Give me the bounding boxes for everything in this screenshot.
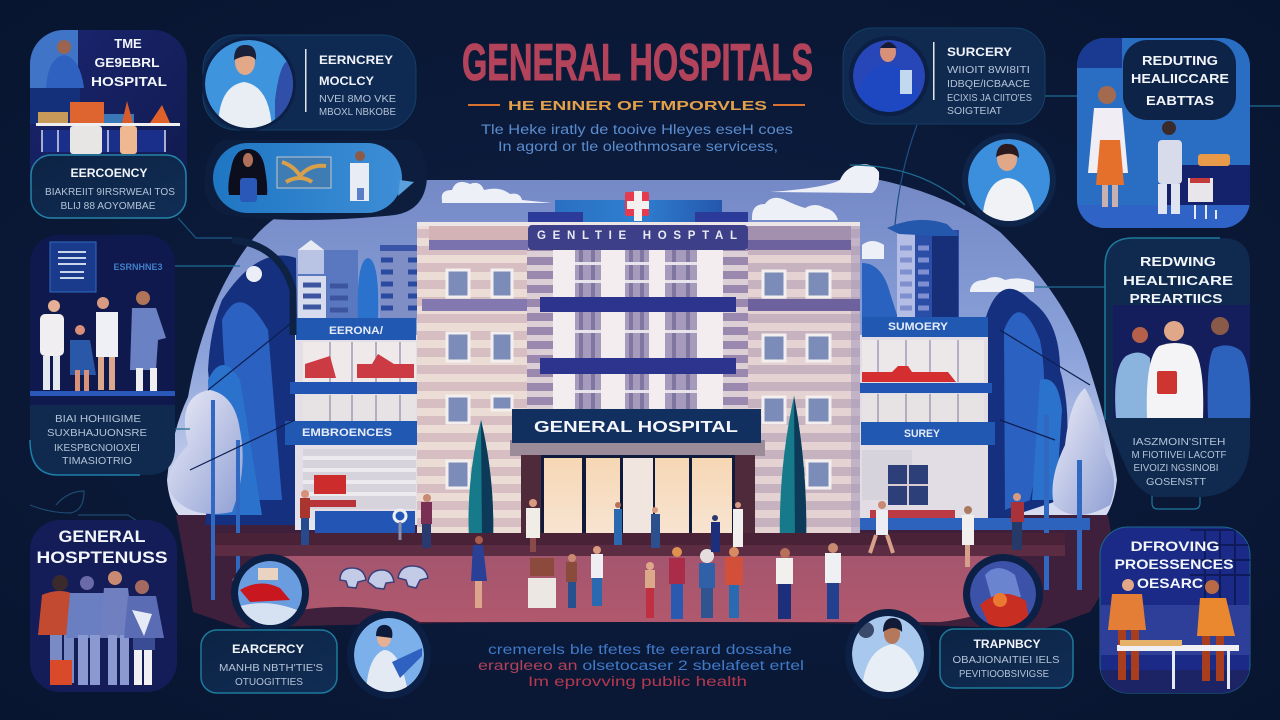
emergency emblem on counter — [394, 510, 406, 540]
striped side strips — [527, 250, 748, 440]
intro paragraph: In agord or tle oleothmosare servicess, — [498, 139, 778, 154]
backdrop grid — [1100, 530, 1250, 695]
heading: HOSPITAL — [91, 74, 167, 89]
heading: GENERAL — [58, 528, 146, 546]
dark arch behind left wing — [232, 240, 293, 335]
dark blue floor bars — [540, 297, 736, 374]
panel: profile top left — [202, 35, 416, 131]
panel: general hospital staff group — [30, 520, 177, 692]
closing paragraph: erargleeo an olsetocaser 2 sbelafeet ertel — [478, 658, 804, 673]
heading callout: EABTTAS — [1146, 94, 1214, 108]
main sign — [512, 409, 761, 443]
canopy — [510, 440, 765, 456]
plaza — [232, 556, 1024, 622]
heading: PREARTIICS — [1130, 291, 1223, 306]
callout: emergency bottom: OTUOGITTIES — [235, 677, 303, 688]
text block: NVEI 8MO VKE — [319, 94, 396, 105]
windows — [447, 270, 830, 488]
ground — [176, 515, 1111, 630]
icon: lab technician circle — [347, 611, 431, 699]
heading: GE9EBRL — [94, 55, 160, 70]
text block: SOIGTEIAT — [947, 106, 1002, 117]
icon: nurse portrait circle — [962, 133, 1056, 227]
panel: improving professional research — [1100, 527, 1250, 695]
heading: HEALTIICARE — [1123, 273, 1233, 288]
heading — [91, 36, 167, 89]
text block: EIVOIZI NGSINOBI — [1134, 463, 1218, 474]
heading — [36, 528, 168, 567]
upper building sign — [528, 225, 748, 250]
subtitle with orange rules: HE ENINER OF TMPORVLES — [508, 99, 767, 113]
red cross sign — [625, 191, 649, 221]
sky — [167, 180, 1117, 530]
wing sign: emergency lower — [285, 421, 417, 445]
entrance — [521, 455, 755, 548]
upper building sign: GENLTIE HOSPTAL — [537, 230, 737, 242]
wires over trees — [190, 320, 1090, 470]
photo: staff portrait — [30, 30, 84, 88]
callout: emergency bottom — [201, 630, 337, 693]
callout text: SUXBHAJUONSRE — [47, 428, 147, 439]
closing paragraph — [478, 642, 804, 689]
central bay — [553, 250, 723, 410]
sidewalk — [215, 533, 1065, 556]
panel: reducing healthcare barriers — [1077, 38, 1250, 230]
people exchanging a document — [1115, 317, 1250, 418]
rooftop dark blocks — [528, 212, 748, 222]
crowd of people — [300, 490, 1024, 619]
callout: emergency bottom: EARCERCY — [232, 642, 304, 656]
heading: PROESSENCES — [1114, 557, 1234, 572]
right blue tree — [985, 289, 1068, 525]
text block: EERNCREY — [319, 53, 393, 67]
icon: surgeon portrait — [853, 40, 925, 112]
clinic room backdrop — [1077, 38, 1250, 230]
text block — [947, 45, 1032, 117]
text block: IDBQE/ICBAACE — [947, 79, 1030, 90]
wing sign: surgery lower: SUREY — [904, 428, 941, 440]
left blue tree — [205, 256, 300, 525]
right background tower and foliage — [862, 220, 959, 318]
text block: WIIOIT 8WI8ITI — [947, 65, 1030, 76]
intro paragraph: Tle Heke iratly de tooive Hleyes eseH coes — [481, 122, 793, 137]
wing sign: emergency upper: EERONA/ — [329, 325, 383, 337]
icon: hospital bed circle — [231, 554, 309, 632]
callout text: IKESPBCNOIOXEI — [54, 443, 140, 454]
text block: M FIOTIIVEI LACOTF — [1132, 450, 1226, 461]
main hospital building — [417, 191, 860, 548]
photo: supply shelf — [36, 101, 180, 126]
heading: HOSPTENUSS — [36, 549, 168, 567]
closing paragraph: cremerels ble tfetes fte eerard dossahe — [488, 642, 792, 657]
worker left — [1108, 579, 1146, 680]
left white tree — [168, 390, 243, 600]
heading callout: HEALIICCARE — [1131, 71, 1229, 86]
top mauve bands — [429, 226, 851, 250]
text block: IASZMOIN'SITEH — [1132, 437, 1226, 448]
wing sign: emergency lower: EMBROENCES — [302, 427, 392, 439]
heading: REDWING — [1140, 254, 1216, 269]
clouds — [442, 164, 1034, 292]
work table — [1117, 640, 1239, 689]
heading: TME — [114, 36, 142, 51]
callout: training bottom: TRAPNBCY — [974, 637, 1040, 651]
right white tree — [1044, 388, 1114, 590]
icon: small figure in white — [350, 151, 369, 201]
text block — [1132, 437, 1226, 488]
left background towers — [298, 240, 417, 320]
callout: emergency: BIAKREIIT 9IRSRWEAI TOS — [45, 187, 175, 198]
icon: doctor circle bottom right — [845, 609, 931, 699]
callout: training bottom: PEVITIOOBSIVIGSE — [959, 669, 1049, 680]
wing sign: surgery upper: SUMOERY — [888, 321, 949, 333]
callout: training bottom — [940, 629, 1073, 688]
panel: surgery profile — [843, 28, 1045, 124]
text block: MBOXL NBKOBE — [319, 107, 396, 118]
text block: ECIXIS JA CIITO'ES — [947, 93, 1032, 104]
closing paragraph: Im eprovving public health — [528, 674, 747, 689]
staff figures — [40, 291, 166, 392]
patient figure — [1158, 121, 1182, 214]
table with supplies — [1188, 154, 1230, 219]
worker right — [1197, 580, 1235, 681]
callout: emergency: EERCOENCY — [70, 166, 148, 180]
heading: DFROVING — [1130, 539, 1220, 554]
icon: gold map — [277, 157, 331, 188]
rooftop blue box — [555, 200, 722, 222]
callout: training bottom: OBAJIONAITIEI IELS — [952, 655, 1060, 666]
photo: bottles and cabinets — [42, 126, 166, 154]
panel: reducing healthcare practices — [1105, 238, 1250, 497]
text block: MOCLCY — [319, 74, 374, 88]
cypress trees — [468, 396, 806, 545]
icon: dark robed figure — [228, 149, 267, 202]
heading: OESARC — [1137, 576, 1203, 591]
doctor in white coat — [1088, 86, 1128, 207]
wall chart — [50, 242, 96, 292]
plaza emblem — [340, 566, 428, 589]
heading callout — [1123, 40, 1236, 120]
panel: the general hospital — [30, 30, 187, 218]
wing sign: emergency upper — [296, 318, 416, 340]
text block: GOSENSTT — [1146, 477, 1206, 488]
central illustration: sky and ground scene — [167, 164, 1117, 630]
panel: emergency care team — [30, 235, 175, 475]
text block — [319, 53, 396, 118]
heading — [1123, 254, 1233, 306]
right wing — [858, 335, 1090, 530]
callout: emergency — [31, 155, 186, 218]
wing sign: surgery lower — [861, 422, 995, 445]
callout text: TIMASIOTRIO — [62, 456, 132, 467]
callout text: BIAI HOHIIGIME — [55, 414, 141, 425]
callout text — [30, 405, 175, 475]
wing sign: surgery upper — [862, 317, 988, 337]
left wing — [290, 335, 420, 533]
title: GENERAL HOSPITALS — [462, 34, 813, 92]
icon: surgery detail circle — [963, 554, 1043, 634]
intro paragraph — [481, 122, 793, 154]
staff group figures — [38, 571, 164, 685]
callout: emergency: BLIJ 88 AOYOMBAE — [60, 201, 156, 212]
text block: SURCERY — [947, 45, 1012, 59]
lavender floor bands — [422, 299, 860, 311]
heading callout: REDUTING — [1142, 53, 1218, 68]
icon: doctor portrait — [205, 40, 300, 130]
panel: blue pill with figures — [204, 140, 427, 220]
label: ESRNHNE3 — [113, 262, 163, 272]
heading — [1114, 539, 1234, 591]
connector lines — [30, 96, 1280, 523]
callout: emergency bottom: MANHB NBTH'TIE'S — [219, 663, 323, 674]
main sign: GENERAL HOSPITAL — [534, 419, 738, 436]
